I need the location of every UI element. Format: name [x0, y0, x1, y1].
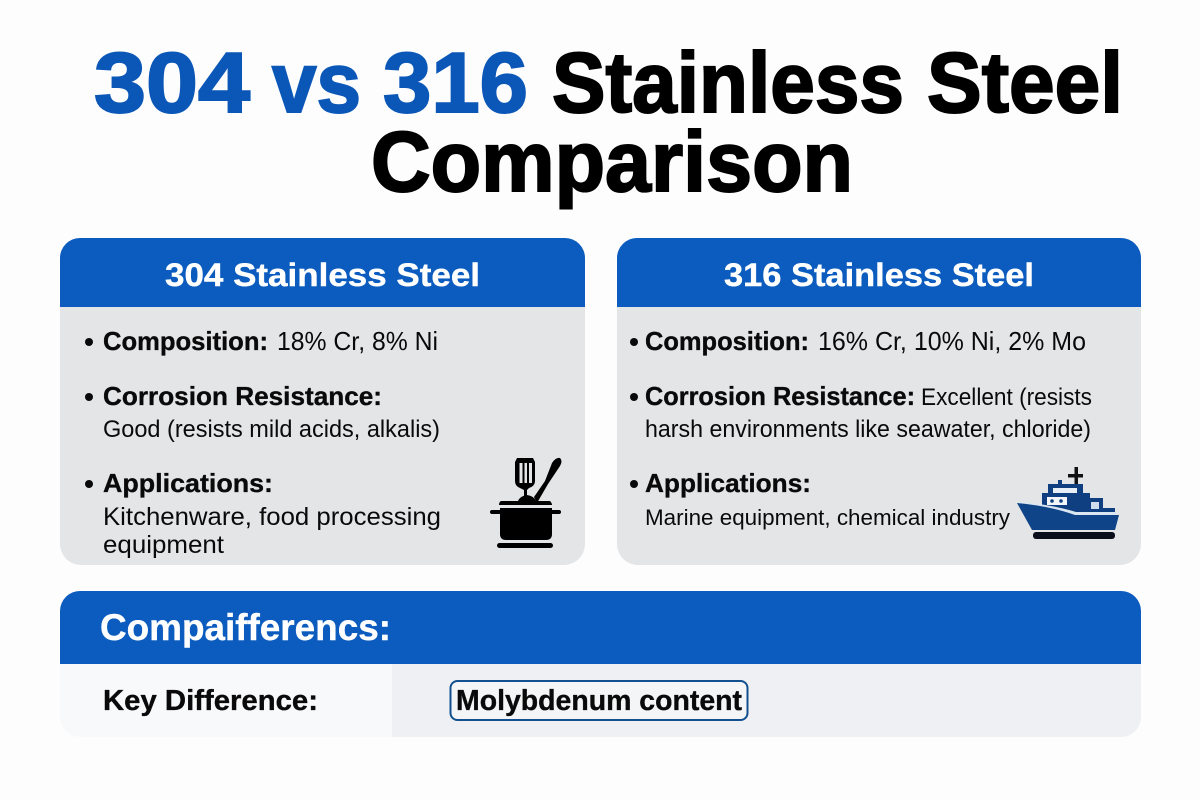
applications 316: Marine equipment, chemical industry	[645, 505, 1010, 530]
comparison header: Compaifferencs:	[100, 607, 391, 648]
icon: pot with utensils	[490, 458, 562, 548]
applications 304: equipment	[103, 531, 224, 559]
title: 316	[383, 36, 528, 131]
callout: molybdenum content: Molybdenum content	[456, 685, 742, 717]
title: Comparison	[371, 115, 853, 210]
panel: comparison differences	[60, 591, 1141, 737]
value cell background	[392, 664, 1141, 737]
title: 304	[94, 36, 250, 131]
comparison header	[60, 591, 1141, 664]
corrosion resistance 316: Excellent (resists	[921, 384, 1092, 411]
corrosion resistance 316	[630, 381, 1092, 443]
key difference label: Key Difference:	[103, 685, 318, 717]
panel header: 304	[60, 238, 585, 307]
applications 304	[85, 468, 441, 559]
corrosion resistance 304: Corrosion Resistance:	[103, 381, 382, 411]
applications 316	[630, 468, 1010, 530]
composition 316	[630, 326, 1086, 356]
composition 316: 16% Cr, 10% Ni, 2% Mo	[818, 326, 1086, 356]
corrosion resistance 316: Corrosion Resistance:	[645, 381, 915, 411]
title: vs	[272, 36, 361, 131]
panel: 304 stainless steel	[60, 238, 585, 565]
applications 316: Applications:	[645, 468, 811, 498]
panel header: 316: 316 Stainless Steel	[724, 257, 1034, 293]
title: Steel	[927, 36, 1123, 131]
composition 304	[85, 326, 438, 356]
corrosion resistance 316: harsh environments like seawater, chloride)	[645, 416, 1091, 443]
title: Stainless	[552, 36, 904, 131]
composition 304: 18% Cr, 8% Ni	[277, 326, 438, 356]
corrosion resistance 304	[85, 381, 440, 443]
composition 304: Composition:	[103, 326, 268, 356]
icon: ship	[1017, 467, 1119, 539]
applications 304: Kitchenware, food processing	[103, 503, 441, 531]
composition 316: Composition:	[645, 326, 809, 356]
table row background	[60, 664, 1141, 737]
corrosion resistance 304: Good (resists mild acids, alkalis)	[103, 416, 440, 443]
applications 304: Applications:	[103, 468, 273, 498]
panel header: 316	[617, 238, 1141, 307]
panel: 316 stainless steel	[617, 238, 1141, 565]
panel header: 304: 304 Stainless Steel	[165, 257, 480, 293]
title	[94, 36, 1123, 210]
